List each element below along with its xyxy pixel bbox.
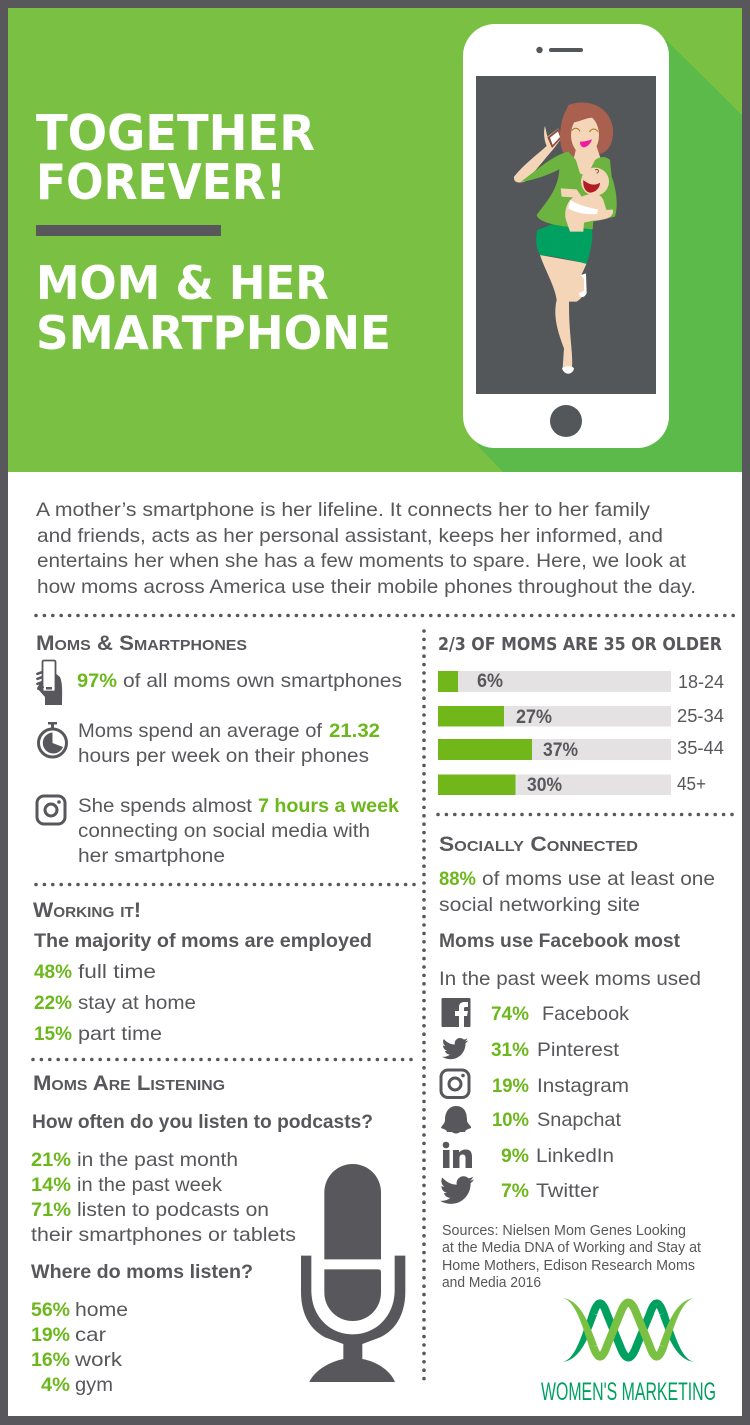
row: instagram — [492, 1075, 629, 1097]
title: together forever — [36, 105, 315, 211]
icon: facebook — [442, 998, 470, 1027]
icon: instagram — [441, 1070, 469, 1098]
stat list: where: home — [75, 1299, 128, 1321]
row: facebook — [491, 1003, 629, 1025]
sources: Home Mothers, Edison Research Moms — [442, 1258, 695, 1274]
stat list: podcasts: their smartphones or tablets — [31, 1224, 296, 1246]
row: snapchat: 10% — [492, 1109, 529, 1131]
stat list: podcasts: in the past week — [77, 1174, 222, 1196]
row: snapchat — [492, 1109, 622, 1131]
stat list: where: 16% — [31, 1349, 70, 1371]
stat list: podcasts: 14% — [31, 1174, 71, 1196]
illustration: smartphone — [463, 24, 669, 448]
stat: 7 hours a week — [78, 795, 399, 867]
heading: moms are listening: Moms Are Listening — [33, 1072, 225, 1095]
intro paragraph: how moms across America use their mobile phones throughout the day. — [37, 576, 696, 598]
title: together forever: FOREVER! — [36, 154, 286, 211]
panel: age chart — [438, 635, 724, 796]
stat: 7 hours a week: connecting on social media with — [78, 820, 370, 842]
icon: instagram — [37, 796, 65, 824]
icon: stopwatch — [38, 722, 66, 757]
hair back — [560, 103, 613, 163]
stat list: where: gym — [75, 1374, 113, 1396]
stat: 7 hours a week: 7 hours a week — [258, 795, 399, 817]
stat: 97 percent own smartphones: of all moms own smartphones — [123, 670, 402, 692]
stat: 88 percent social networking: social networking site — [439, 894, 640, 916]
stat: 88 percent social networking — [439, 868, 715, 916]
row: linkedin: 9% — [501, 1145, 529, 1167]
row: twitter: Twitter — [536, 1180, 600, 1202]
stat: 7 hours a week: her smartphone — [78, 845, 225, 867]
icon: pinterest bird — [442, 1038, 468, 1059]
row: facebook: Facebook — [542, 1003, 629, 1025]
bar chart: age groups: 35-44 — [677, 737, 724, 758]
heading: age chart: 2/3 OF MOMS ARE 35 OR OLDER — [438, 635, 722, 655]
stat list: podcasts: in the past month — [77, 1149, 238, 1171]
icon: linkedin — [443, 1142, 472, 1168]
row: pinterest — [491, 1039, 620, 1061]
stat list: podcasts: 71% — [31, 1199, 71, 1221]
row: snapchat: Snapchat — [537, 1109, 622, 1131]
stat: 88 percent social networking: of moms use at least one — [482, 868, 715, 890]
face — [571, 115, 599, 155]
bar chart: age groups: 30% — [527, 774, 562, 796]
stat list: podcasts — [31, 1149, 296, 1246]
bar chart: age groups: 6% — [477, 670, 503, 692]
sources: Sources: Nielsen Mom Genes Looking — [442, 1223, 686, 1239]
subheading: majority employed: The majority of moms are employed — [34, 930, 372, 952]
stat: 97 percent own smartphones: 97% — [77, 670, 117, 692]
row: instagram: Instagram — [537, 1075, 629, 1097]
icon: snapchat — [441, 1106, 471, 1134]
title: mom and her smartphone — [36, 256, 391, 360]
stat: 21.32 hours per week: hours per week on their phones — [78, 745, 369, 767]
heading: working it: Working it! — [33, 899, 141, 922]
heading: moms and smartphones: Moms & Smartphones — [36, 632, 247, 655]
row: twitter — [501, 1180, 600, 1202]
intro paragraph: entertains her when she has a few moments to spare. Here, we look at — [37, 550, 687, 572]
panel: moms are listening — [31, 1072, 405, 1396]
stat list: employment: part time — [78, 1023, 162, 1045]
text: past week intro: In the past week moms used — [439, 968, 701, 990]
stat list: podcasts: 21% — [31, 1149, 71, 1171]
panel: socially connected — [439, 833, 715, 1291]
stat list: employment: stay at home — [78, 992, 196, 1014]
stat: 21.32 hours per week — [78, 720, 380, 767]
stat: 21.32 hours per week: 21.32 — [329, 720, 380, 742]
sources: and Media 2016 — [442, 1275, 541, 1291]
stat list: employment: 22% — [34, 992, 72, 1014]
subheading: facebook most: Moms use Facebook most — [439, 930, 680, 952]
stat list: where: car — [75, 1324, 107, 1346]
title divider bar — [36, 225, 221, 236]
panel: moms and smartphones — [36, 632, 402, 867]
bar chart: age groups: 27% — [516, 706, 552, 728]
row: instagram: 19% — [492, 1075, 529, 1097]
intro paragraph — [36, 499, 696, 598]
stat: 7 hours a week: She spends almost — [78, 795, 253, 817]
row: pinterest: 31% — [491, 1039, 529, 1061]
stat list: employment: 15% — [34, 1023, 72, 1045]
heading: socially connected: Socially Connected — [439, 833, 638, 856]
row: linkedin: LinkedIn — [536, 1145, 614, 1167]
icon: microphone — [301, 1164, 405, 1382]
title: mom and her smartphone: MOM & HER — [36, 256, 329, 310]
title: together forever: TOGETHER — [36, 105, 315, 162]
subheading: where moms listen: Where do moms listen? — [31, 1261, 253, 1283]
icon: hand holding phone — [36, 660, 62, 705]
stat list: where: 19% — [31, 1324, 70, 1346]
row: facebook: 74% — [491, 1003, 529, 1025]
stat list: where: 4% — [41, 1374, 70, 1396]
sources: at the Media DNA of Working and Stay at — [442, 1240, 701, 1256]
stat list: employment — [34, 961, 196, 1045]
subheading: podcast question: How often do you listen to podcasts? — [32, 1111, 373, 1133]
intro paragraph: A mother’s smartphone is her lifeline. It connects her to her family — [36, 499, 650, 521]
row: pinterest: Pinterest — [537, 1039, 620, 1061]
stat list: where — [31, 1299, 128, 1396]
stat list: podcasts: listen to podcasts on — [77, 1199, 269, 1221]
stat list: where: 56% — [31, 1299, 70, 1321]
panel: green header — [8, 8, 742, 472]
logo: women's marketing — [541, 1298, 716, 1406]
bar chart: age groups: 45+ — [677, 773, 706, 794]
icon: twitter — [440, 1176, 474, 1204]
row: linkedin — [501, 1145, 614, 1167]
green top — [521, 152, 617, 229]
stat list: employment: full time — [78, 961, 156, 983]
stat: 88 percent social networking: 88% — [439, 868, 476, 890]
title: mom and her smartphone: SMARTPHONE — [36, 306, 391, 360]
stat list: where: work — [74, 1349, 122, 1371]
bar chart: age groups: 37% — [543, 739, 578, 761]
bar chart: age groups — [438, 670, 724, 796]
row: twitter: 7% — [501, 1180, 529, 1202]
illustration: mom holding baby and phone — [514, 103, 617, 374]
intro paragraph: and friends, acts as her personal assistant, keeps her informed, and — [37, 525, 663, 547]
bar chart: age groups: 25-34 — [677, 705, 724, 726]
stat: 21.32 hours per week: Moms spend an average of — [78, 720, 323, 742]
baby — [561, 188, 613, 232]
neck and chest — [572, 147, 603, 187]
stat list: employment: 48% — [34, 961, 72, 983]
panel: working it — [33, 899, 372, 1045]
sources — [442, 1223, 701, 1291]
bar chart: age groups: 18-24 — [678, 671, 724, 692]
